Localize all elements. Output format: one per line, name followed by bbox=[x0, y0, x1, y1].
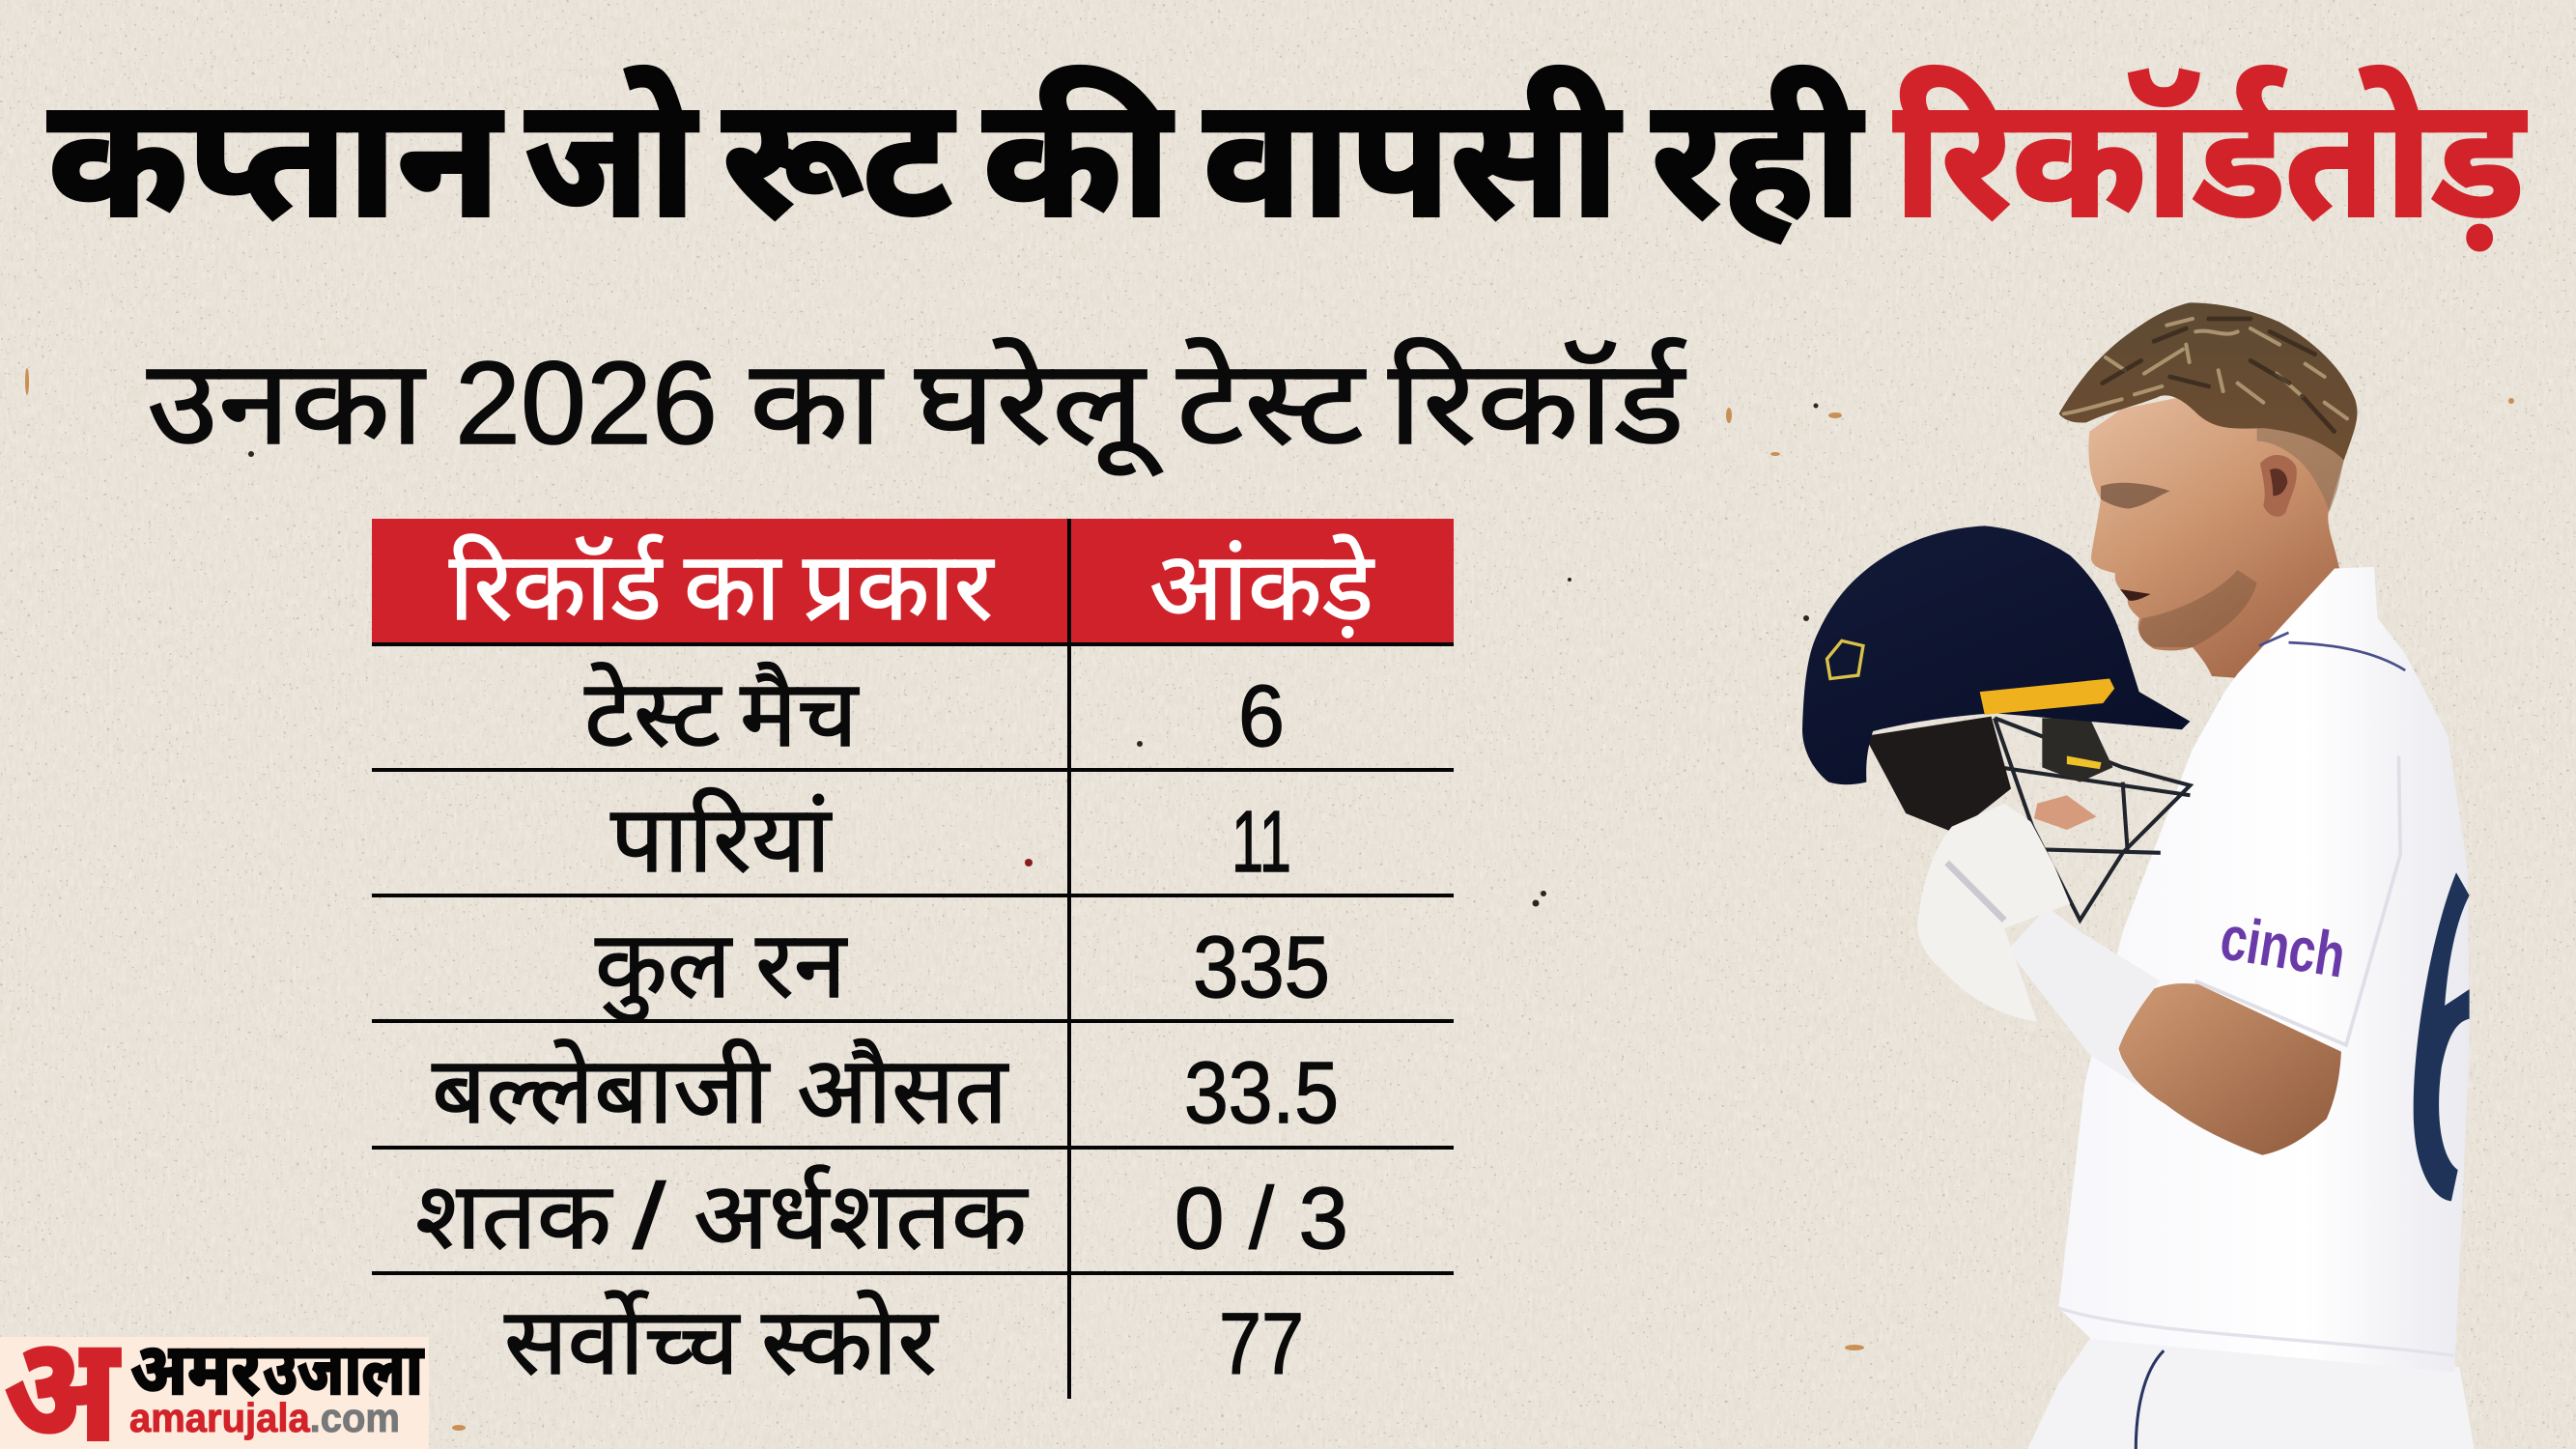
wrist strapping bbox=[2008, 907, 2161, 1086]
row: test matches bbox=[584, 662, 1285, 766]
row: total runs bbox=[595, 914, 1330, 1022]
subtitle: टेस्ट bbox=[1176, 337, 1367, 469]
row: centuries / half-centuries bbox=[415, 1164, 1348, 1268]
table header row: रिकॉर्ड bbox=[449, 533, 664, 639]
logo wordmark: अमर bbox=[130, 1329, 262, 1409]
row: batting average: औसत bbox=[797, 1039, 1009, 1143]
logo wordmark bbox=[130, 1329, 424, 1409]
title: वापसी bbox=[1203, 66, 1622, 251]
subtitle: का bbox=[750, 337, 885, 469]
row: centuries / half-centuries: 0 / 3 bbox=[1175, 1171, 1348, 1267]
subtitle: उनका bbox=[147, 337, 427, 469]
table: home test record bbox=[372, 519, 1454, 1399]
table header row: आंकड़े bbox=[1149, 533, 1375, 639]
row: total runs: 335 bbox=[1193, 920, 1330, 1016]
table header row: प्रकार bbox=[803, 533, 995, 639]
title highlight: record-breaking: रिकॉर्डतोड़ bbox=[1894, 66, 2527, 251]
title bbox=[48, 66, 2527, 251]
table header row bbox=[372, 519, 1454, 644]
table rules bbox=[372, 519, 1454, 1399]
row: total runs: कुल bbox=[595, 914, 733, 1022]
row: highest score: स्कोर bbox=[761, 1291, 939, 1394]
yellow grille marker bbox=[2067, 755, 2102, 769]
shirt number bbox=[2414, 872, 2470, 1201]
helmet logo bbox=[1827, 640, 1863, 679]
row: centuries / half-centuries: अर्धशतक bbox=[694, 1164, 1029, 1268]
subtitle bbox=[147, 337, 1686, 476]
row: innings bbox=[610, 788, 1291, 892]
hair bbox=[2059, 302, 2358, 461]
sponsor logo: cinch bbox=[2216, 901, 2350, 991]
logo: Amar Ujala bbox=[0, 1308, 429, 1449]
title: रूट bbox=[722, 66, 954, 251]
shirt bbox=[2058, 567, 2470, 1372]
subtitle: घरेलू bbox=[915, 337, 1163, 476]
stubble bbox=[2139, 570, 2257, 647]
row: highest score bbox=[504, 1290, 1304, 1394]
row: batting average: बल्लेबाजी bbox=[432, 1038, 771, 1143]
row: test matches: 6 bbox=[1238, 668, 1285, 765]
hair highlights bbox=[2064, 319, 2347, 418]
glove bbox=[1917, 804, 2070, 1022]
ear bbox=[2260, 455, 2297, 517]
logo url: amarujala.com bbox=[129, 1395, 400, 1440]
row: centuries / half-centuries: शतक bbox=[415, 1165, 613, 1268]
row: batting average: 33.5 bbox=[1184, 1045, 1339, 1142]
row: highest score: 77 bbox=[1219, 1296, 1304, 1393]
trousers bbox=[2027, 1334, 2475, 1449]
subtitle: 2026 bbox=[455, 337, 718, 469]
row: test matches: मैच bbox=[740, 662, 860, 766]
helmet grille bbox=[1995, 718, 2190, 921]
row: centuries / half-centuries: / bbox=[633, 1165, 665, 1268]
helmet shell bbox=[1802, 526, 2190, 784]
face and neck bbox=[2088, 396, 2344, 679]
title: जो bbox=[525, 66, 698, 251]
helmet inner strap bbox=[2042, 718, 2112, 782]
eye and brow bbox=[2101, 483, 2170, 509]
helmet padding bbox=[1865, 717, 2011, 833]
logo wordmark: उजाला bbox=[263, 1329, 424, 1409]
player illustration: Joe Root holding helmet bbox=[1802, 302, 2475, 1449]
row: batting average bbox=[432, 1038, 1339, 1143]
helmet peak badge bbox=[1980, 679, 2114, 715]
row: total runs: रन bbox=[755, 914, 848, 1017]
title: रही bbox=[1652, 66, 1864, 251]
mouth bbox=[2120, 589, 2151, 601]
subtitle: रिकॉर्ड bbox=[1388, 337, 1686, 469]
faded hair at side bbox=[2257, 428, 2344, 512]
table header row: का bbox=[684, 533, 782, 639]
row: highest score: सर्वोच्च bbox=[504, 1290, 741, 1394]
forearm bbox=[2118, 983, 2341, 1155]
title: की bbox=[983, 66, 1174, 251]
row: test matches: टेस्ट bbox=[584, 662, 722, 766]
title: कप्तान bbox=[48, 66, 503, 251]
head bbox=[2059, 302, 2358, 679]
row: innings: पारियां bbox=[610, 788, 833, 892]
peach helmet pad bbox=[2034, 795, 2096, 830]
row: innings: 11 bbox=[1231, 794, 1291, 891]
